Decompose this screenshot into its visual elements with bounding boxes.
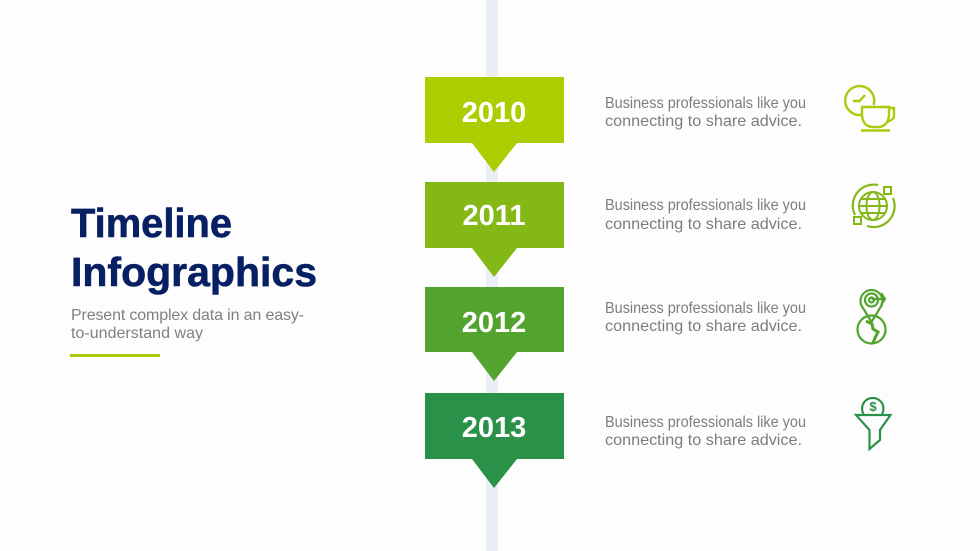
text block: 2012 description	[605, 300, 806, 335]
panel: 2012 marker: 2012	[462, 307, 526, 339]
text block: 2011 description: connecting to share advice.	[605, 216, 802, 233]
panel: 2011 marker	[425, 182, 564, 277]
text block: 2010 description	[605, 95, 806, 130]
text block: 2012 description: Business professionals like you	[605, 300, 806, 317]
panel: 2011 marker: 2011	[463, 200, 525, 232]
panel: 2012 marker	[425, 287, 564, 381]
panel: 2013 marker	[425, 393, 564, 488]
text block: 2012 description: connecting to share advice.	[605, 318, 802, 335]
panel: 2013 marker: 2013	[462, 412, 526, 444]
text block: 2013 description	[605, 414, 806, 449]
title accent underline	[70, 354, 160, 357]
title: Timeline	[71, 200, 232, 246]
text block: 2011 description	[605, 197, 806, 233]
text block: 2010 description: connecting to share advice.	[605, 113, 802, 130]
title: Infographics	[71, 249, 317, 295]
panel: 2010 marker: 2010	[462, 97, 526, 129]
subtitle: Present complex data in an easy-	[71, 307, 304, 324]
icon: dollar funnel: $	[869, 399, 877, 414]
icon: target pin over globe	[858, 290, 886, 344]
subtitle	[71, 307, 304, 342]
icon: globe with orbit arrows	[853, 185, 895, 227]
text block: 2010 description: Business professionals like you	[605, 95, 806, 112]
panel: heading block	[70, 200, 317, 357]
title	[71, 200, 317, 295]
subtitle: to-understand way	[71, 325, 203, 342]
panel: 2010 marker	[425, 77, 564, 172]
text block: 2011 description: Business professionals like you	[605, 197, 806, 214]
icon: dollar funnel	[856, 398, 890, 449]
icon: clock and coffee cup	[845, 86, 894, 130]
text block: 2013 description: Business professionals like you	[605, 414, 806, 431]
text block: 2013 description: connecting to share advice.	[605, 432, 802, 449]
